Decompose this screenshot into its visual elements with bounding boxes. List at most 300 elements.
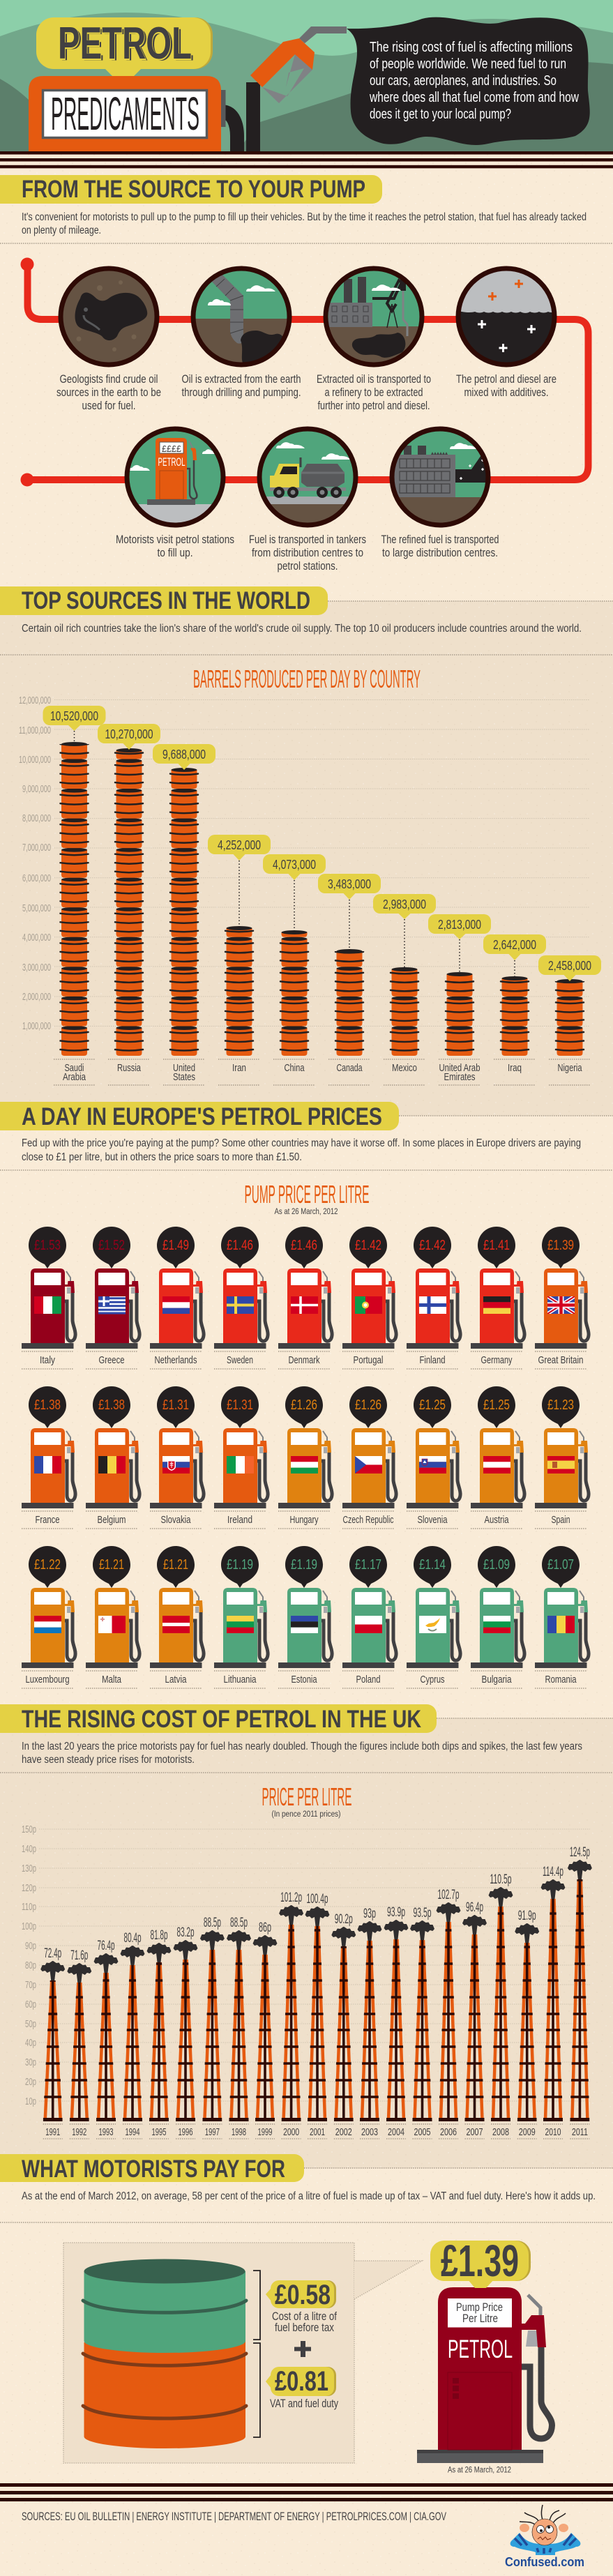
derrick: 1996 <box>173 1927 198 2139</box>
section: the rising cost of petrol in the UK: PRICE PER LITRE <box>262 1782 351 1811</box>
derrick: 2000 <box>279 1893 303 2139</box>
country label: Saudi <box>64 1062 84 1074</box>
intro text: close to £1 per litre, but in others the price soars to more than £1.50. <box>22 1151 302 1163</box>
tag: £0.81: £0.81 <box>275 2366 328 2397</box>
derrick: 1999: 1999 <box>258 2127 272 2138</box>
large pump <box>417 2236 552 2474</box>
y axis labels: 30p <box>25 2057 36 2068</box>
pump: Austria <box>471 1386 524 1529</box>
pump: Sweden <box>214 1227 268 1369</box>
derrick: 2009: 2009 <box>519 2127 536 2138</box>
pump: Germany: £1.41 <box>483 1238 510 1253</box>
bar: Russia <box>98 724 160 1085</box>
pump: Malta <box>86 1546 139 1688</box>
callout value <box>208 835 271 861</box>
caption: VAT and duty: VAT and fuel duty <box>270 2397 339 2410</box>
stage 7: motorists: ££££ <box>162 444 182 454</box>
country label: China <box>285 1062 305 1074</box>
stage 7: motorists <box>116 427 234 559</box>
icon: petrol pump hoses <box>222 82 253 151</box>
country label <box>439 1059 480 1085</box>
y axis labels: 140p <box>22 1844 36 1855</box>
y axis labels: 12,000,000 <box>19 695 51 706</box>
pump: Denmark: Denmark <box>289 1354 320 1366</box>
caption <box>181 373 301 399</box>
caption <box>249 533 366 573</box>
pump: Portugal: Portugal <box>353 1354 384 1366</box>
caption: to fill up. <box>158 547 192 559</box>
country label: Canada <box>336 1062 363 1074</box>
pump: Cyprus: Cyprus <box>420 1674 445 1685</box>
derrick: 2002: 90.2p <box>335 1912 353 1927</box>
derrick: 2003: 93p <box>363 1907 376 1921</box>
y axis labels: 70p <box>25 1980 36 1991</box>
country label: Nigeria <box>558 1062 582 1074</box>
intro text: our cars, aeroplanes, and industries. So <box>370 73 557 89</box>
pump: Poland: £1.17 <box>355 1557 381 1573</box>
derrick: 2009: 91.9p <box>518 1909 536 1923</box>
caption: Extracted oil is transported to <box>317 373 431 386</box>
y axis labels: 150p <box>22 1824 36 1835</box>
y axis labels: 110p <box>22 1902 36 1913</box>
pump: Luxembourg: Luxembourg <box>25 1674 70 1685</box>
pump: France: France <box>35 1514 60 1526</box>
derrick: 1999: 86p <box>259 1920 271 1935</box>
pump: Greece: £1.52 <box>98 1238 125 1253</box>
pump: Slovenia: £1.25 <box>419 1397 446 1413</box>
pump sign <box>448 2298 512 2328</box>
country label: States <box>173 1071 195 1083</box>
caption <box>381 533 499 559</box>
derrick: 2006: 102.7p <box>437 1888 460 1902</box>
title: PETROL: PETROL <box>58 18 192 69</box>
pump: Netherlands: Netherlands <box>155 1354 197 1366</box>
caption <box>317 373 431 412</box>
caption: further into petrol and diesel. <box>318 400 430 412</box>
country label: United <box>173 1062 195 1074</box>
derrick: 1992: 1992 <box>72 2127 86 2138</box>
callout value <box>43 706 106 731</box>
pump: Estonia: Estonia <box>292 1674 317 1685</box>
bar: Mexico <box>373 894 436 1086</box>
caption: Geologists find crude oil <box>60 373 158 386</box>
pump: Czech Republic: £1.26 <box>355 1397 381 1413</box>
section: what motorists pay for <box>0 2154 613 2474</box>
pump: Romania: £1.07 <box>547 1557 574 1573</box>
derrick: 1998: 88.5p <box>230 1916 248 1930</box>
caption: Fuel is transported in tankers <box>249 533 366 546</box>
header banner <box>0 0 613 151</box>
barrel graphic <box>83 2259 246 2448</box>
bar: China <box>263 854 326 1086</box>
derrick: 2000: 101.2p <box>280 1891 302 1905</box>
derrick: 1999 <box>252 1922 278 2139</box>
derrick: 2011: 124.5p <box>570 1845 590 1860</box>
caption: cost before tax <box>272 2310 337 2334</box>
y axis labels: 6,000,000 <box>22 873 51 884</box>
icon: petrol nozzle <box>250 26 347 103</box>
y axis labels: 100p <box>22 1921 36 1932</box>
derrick: 2002: 2002 <box>335 2127 352 2138</box>
stage 7: motorists: PETROL <box>158 455 186 469</box>
derrick: 2004 <box>384 1907 409 2139</box>
pump: Portugal: £1.42 <box>355 1238 381 1253</box>
derrick: 2001: 100.4p <box>306 1892 328 1907</box>
stage 1: geologists <box>56 266 161 412</box>
stage 2: extraction <box>181 266 301 399</box>
country label <box>273 1059 315 1085</box>
date note: As at 26 March, 2012 <box>448 2466 511 2474</box>
pump: Bulgaria: Bulgaria <box>481 1674 512 1685</box>
title sign <box>29 17 226 151</box>
section shade: rising cost <box>0 1718 613 2168</box>
derrick: 2003 <box>357 1908 382 2139</box>
derrick: 1995: 1995 <box>152 2127 166 2138</box>
derrick: 1997: 88.5p <box>204 1916 221 1930</box>
pump: Belgium: £1.38 <box>98 1397 125 1413</box>
pump: Slovenia <box>407 1386 460 1529</box>
y axis labels: 3,000,000 <box>22 962 51 973</box>
derrick: 2009 <box>515 1911 540 2139</box>
caption: Motorists visit petrol stations <box>116 533 234 546</box>
derrick: 2005: 93.5p <box>413 1906 431 1920</box>
logo: Confused.com <box>505 2505 584 2569</box>
pump: Germany <box>471 1227 524 1369</box>
y axis labels: 90p <box>25 1941 36 1952</box>
bracket: upper <box>253 2271 260 2340</box>
section shade: top sources <box>0 601 613 1116</box>
pump: Great Britain: Great Britain <box>538 1354 583 1366</box>
derrick: 1998 <box>227 1918 251 2139</box>
derrick: 2000: 2000 <box>283 2127 299 2138</box>
intro text: does it get to your local pump? <box>370 107 511 122</box>
country label <box>549 1059 591 1085</box>
pump: Great Britain: £1.39 <box>547 1238 574 1253</box>
caption: petrol stations. <box>278 560 338 573</box>
heading band: THE RISING COST OF PETROL IN THE UK <box>22 1706 421 1733</box>
y axis labels: 60p <box>25 1999 36 2010</box>
callout value <box>538 955 601 981</box>
pump: Latvia: Latvia <box>165 1674 187 1685</box>
y axis labels: 120p <box>22 1883 36 1894</box>
caption <box>116 533 234 559</box>
pump: Romania: Romania <box>545 1674 577 1685</box>
pump: Netherlands <box>150 1227 204 1369</box>
caption: cost before tax: fuel before tax <box>275 2321 335 2334</box>
y axis labels: 130p <box>22 1863 36 1874</box>
pump: Malta: £1.21 <box>99 1557 124 1573</box>
derrick: 2010: 2010 <box>545 2127 561 2138</box>
y axis labels: 5,000,000 <box>22 903 51 914</box>
y axis labels: 2,000,000 <box>22 992 51 1003</box>
derrick: 1993: 76.4p <box>98 1939 114 1953</box>
section: the rising cost of petrol in the UK <box>0 1704 613 2139</box>
pump: Greece <box>86 1227 139 1369</box>
derrick: 2001: 2001 <box>310 2127 325 2138</box>
callout value <box>98 724 160 750</box>
pump: Hungary: Hungary <box>290 1514 319 1526</box>
y axis labels: 1,000,000 <box>22 1021 51 1032</box>
derrick: 1995: 81.8p <box>151 1928 167 1943</box>
country label: Russia <box>117 1062 141 1074</box>
stage 6: tanker <box>249 427 366 573</box>
pump: Lithuania <box>214 1546 268 1688</box>
derrick: 2008: 2008 <box>492 2127 509 2138</box>
pump: Luxembourg <box>22 1546 75 1688</box>
derrick: 2002 <box>331 1914 356 2139</box>
callout value <box>373 894 436 919</box>
pump: Ireland <box>214 1386 268 1529</box>
pump: Slovakia <box>150 1386 204 1529</box>
callout value: 3,483,000 <box>328 877 371 891</box>
derrick: 1994: 1994 <box>126 2127 139 2138</box>
derrick: 1997 <box>200 1918 225 2139</box>
heading band: A DAY IN EUROPE'S PETROL PRICES <box>22 1103 382 1130</box>
derrick: 1997: 1997 <box>205 2127 220 2138</box>
pump: Great Britain <box>535 1227 589 1369</box>
bar: Canada <box>318 874 381 1086</box>
pump: Poland <box>342 1546 396 1688</box>
pump sign: Per Litre <box>462 2312 498 2325</box>
pump: Netherlands: £1.49 <box>162 1238 189 1253</box>
callout value <box>318 874 381 900</box>
pump: Austria: £1.25 <box>483 1397 510 1413</box>
pump: Estonia: £1.19 <box>291 1557 317 1573</box>
pump: Italy <box>22 1227 75 1369</box>
derrick: 2008: 110.5p <box>490 1872 512 1887</box>
bracket: lower <box>253 2343 260 2437</box>
derrick: 2003: 2003 <box>361 2127 378 2138</box>
pump: Poland: Poland <box>356 1674 381 1685</box>
country label: Arabia <box>63 1071 86 1083</box>
derrick: 1991: 72.4p <box>44 1946 61 1961</box>
derrick: 1992: 71.6p <box>70 1948 88 1963</box>
y axis labels: 10p <box>25 2096 36 2107</box>
intro text <box>22 1741 582 1766</box>
title: PETROL: PETROL <box>60 20 194 70</box>
derrick: 1994: 80.4p <box>124 1931 141 1946</box>
pump: Spain: Spain <box>551 1514 570 1526</box>
derrick: 1993 <box>93 1940 119 2139</box>
country label <box>218 1059 260 1085</box>
pump: Belgium: Belgium <box>98 1514 126 1526</box>
intro text <box>369 40 579 122</box>
pump: Hungary <box>278 1386 332 1529</box>
chart date note: As at 26 March, 2012 <box>275 1208 338 1216</box>
price bubble £1.39: £1.39 <box>441 2236 519 2286</box>
pump: Estonia <box>278 1546 332 1688</box>
derrick: 1996: 83.2p <box>177 1925 194 1940</box>
country label: Iran <box>232 1062 246 1074</box>
pump: Lithuania: £1.19 <box>227 1557 253 1573</box>
caption <box>456 373 557 399</box>
pump: Czech Republic: Czech Republic <box>343 1514 394 1526</box>
speech blob: intro <box>347 17 590 145</box>
callout value: 10,520,000 <box>50 709 98 723</box>
pump sign: Pump Price <box>456 2301 503 2314</box>
callout value: 2,983,000 <box>383 897 426 911</box>
pump: Finland: Finland <box>420 1354 445 1366</box>
heading band: TOP SOURCES IN THE WORLD <box>22 587 310 614</box>
derrick: 2010: 114.4p <box>543 1865 563 1879</box>
pump: Latvia: £1.21 <box>163 1557 188 1573</box>
header stripes <box>0 151 613 168</box>
country label: Emirates <box>444 1071 476 1083</box>
derrick: 2008 <box>488 1874 513 2139</box>
derrick: 1994 <box>120 1933 145 2139</box>
derrick: 1998: 1998 <box>232 2127 246 2138</box>
pump: Germany: Germany <box>481 1354 513 1366</box>
pump: Finland <box>407 1227 460 1369</box>
pump: France: £1.38 <box>34 1397 61 1413</box>
pump: Sweden: Sweden <box>227 1354 253 1366</box>
y axis labels: 11,000,000 <box>19 725 51 736</box>
intro text: have seen steady price rises for motorists. <box>22 1754 195 1766</box>
pump: Malta: Malta <box>102 1674 121 1685</box>
bar: Nigeria <box>538 955 601 1086</box>
heading band: FROM THE SOURCE TO YOUR PUMP <box>22 176 365 203</box>
section: from the source to your pump <box>0 175 613 573</box>
caption <box>56 373 161 412</box>
y axis labels: 9,000,000 <box>22 784 51 795</box>
caption: mixed with additives. <box>464 386 548 399</box>
country label: Iraq <box>508 1062 522 1074</box>
pump: Cyprus <box>407 1546 460 1688</box>
pump: Ireland: £1.31 <box>227 1397 253 1413</box>
pump: Belgium <box>86 1386 139 1529</box>
pump: Denmark <box>278 1227 332 1369</box>
section: a day in Europe's petrol prices <box>0 1102 613 1688</box>
breakdown panel <box>63 2243 422 2463</box>
country label <box>163 1059 205 1085</box>
country label <box>54 1059 95 1085</box>
pump: Slovenia: Slovenia <box>417 1514 448 1526</box>
country label <box>384 1059 425 1085</box>
derrick: 1995 <box>146 1930 172 2139</box>
pump word: PETROL <box>448 2335 513 2363</box>
derrick: 1991 <box>40 1948 66 2139</box>
pump: Ireland: Ireland <box>227 1514 252 1526</box>
caption: to large distribution centres. <box>382 547 498 559</box>
stage 5: distribution centre <box>381 427 499 559</box>
y axis labels: 50p <box>25 2019 36 2030</box>
y axis labels: 10,000,000 <box>19 755 51 766</box>
bar: Iran <box>208 835 271 1086</box>
country label <box>328 1059 370 1085</box>
callout value <box>483 934 546 960</box>
stage 3: refinery <box>317 266 431 412</box>
callout value: 2,458,000 <box>548 959 591 973</box>
derrick: 2001 <box>305 1894 329 2139</box>
pipeline connecting the stages <box>21 258 589 487</box>
mascot <box>510 2505 580 2555</box>
pump: Hungary: £1.26 <box>291 1397 317 1413</box>
callout value <box>153 744 215 770</box>
pump: Slovakia: £1.31 <box>162 1397 189 1413</box>
chart subtitle: (In pence 2011 prices) <box>272 1810 341 1819</box>
section: top sources in the world <box>0 586 613 1085</box>
country label <box>108 1059 150 1085</box>
country label <box>494 1059 536 1085</box>
pump: Bulgaria <box>471 1546 524 1688</box>
pump: Latvia <box>150 1546 204 1688</box>
plus sign <box>294 2341 311 2357</box>
callout value: 4,073,000 <box>273 858 316 872</box>
pump: Italy: £1.53 <box>34 1238 61 1253</box>
y axis labels: 20p <box>25 2077 36 2088</box>
pump: Spain: £1.23 <box>547 1397 574 1413</box>
tag: £0.58: £0.58 <box>275 2280 331 2310</box>
y axis labels: 80p <box>25 1960 36 1971</box>
callout value <box>263 854 326 880</box>
pump door <box>448 2372 512 2450</box>
caption: The petrol and diesel are <box>456 373 557 386</box>
pump: Czech Republic <box>342 1386 396 1529</box>
title: PETROL: PETROL <box>58 17 192 68</box>
pump: Finland: £1.42 <box>419 1238 446 1253</box>
pump: Italy: Italy <box>40 1354 55 1366</box>
bar: United States <box>153 729 215 1085</box>
caption: from distribution centres to <box>252 547 363 559</box>
pump: France <box>22 1386 75 1529</box>
pump: Denmark: £1.46 <box>291 1238 317 1253</box>
pump: Bulgaria: £1.09 <box>483 1557 510 1573</box>
footer stripes <box>0 2483 613 2501</box>
derrick: 2011: 2011 <box>572 2127 588 2138</box>
pump: Luxembourg: £1.22 <box>34 1557 61 1573</box>
heading band: WHAT MOTORISTS PAY FOR <box>22 2155 285 2183</box>
pump: Romania <box>535 1546 589 1688</box>
section: a day in Europe's petrol prices: PUMP PRICE PER LITRE <box>244 1180 370 1209</box>
callout value: 2,813,000 <box>438 918 481 932</box>
country label: Mexico <box>392 1062 417 1074</box>
pump: Cyprus: £1.14 <box>419 1557 446 1573</box>
derrick: 2005: 2005 <box>414 2127 431 2138</box>
derrick: 1996: 1996 <box>179 2127 192 2138</box>
caption: sources in the earth to be <box>56 386 161 399</box>
derrick: 2010 <box>541 1841 565 2139</box>
header banner: PREDICAMENTS <box>51 88 199 140</box>
caption: The refined fuel is transported <box>381 533 499 546</box>
pump: Greece: Greece <box>99 1354 124 1366</box>
derrick: 2007 <box>462 1902 487 2139</box>
y axis labels: 7,000,000 <box>22 842 51 854</box>
y axis labels <box>19 695 51 1032</box>
caption: a refinery to be extracted <box>325 386 423 399</box>
wordmark: Confused.com <box>505 2555 584 2569</box>
derrick: 2004: 93.9p <box>387 1905 405 1920</box>
y axis labels: 8,000,000 <box>22 813 51 824</box>
derrick: 1991: 1991 <box>45 2127 60 2138</box>
derrick: 2005 <box>410 1908 434 2139</box>
derrick: 2006: 2006 <box>440 2127 457 2138</box>
bar: Saudi Arabia <box>43 706 106 1085</box>
pump: Austria: Austria <box>484 1514 509 1526</box>
callout value: 9,688,000 <box>162 748 206 762</box>
derrick: 1992 <box>67 1950 92 2139</box>
stage 4: additives <box>456 266 557 399</box>
y axis labels <box>22 1824 36 2107</box>
callout value: 2,642,000 <box>493 938 536 952</box>
derrick: 2006 <box>437 1890 460 2139</box>
pump: Portugal <box>342 1227 396 1369</box>
caption: through drilling and pumping. <box>181 386 301 399</box>
callout value: 10,270,000 <box>105 727 153 741</box>
pump: Spain <box>535 1386 589 1529</box>
y axis labels: 4,000,000 <box>22 932 51 944</box>
caption: cost before tax: Cost of a litre of <box>272 2310 337 2323</box>
derrick: 2011 <box>568 1841 592 2139</box>
